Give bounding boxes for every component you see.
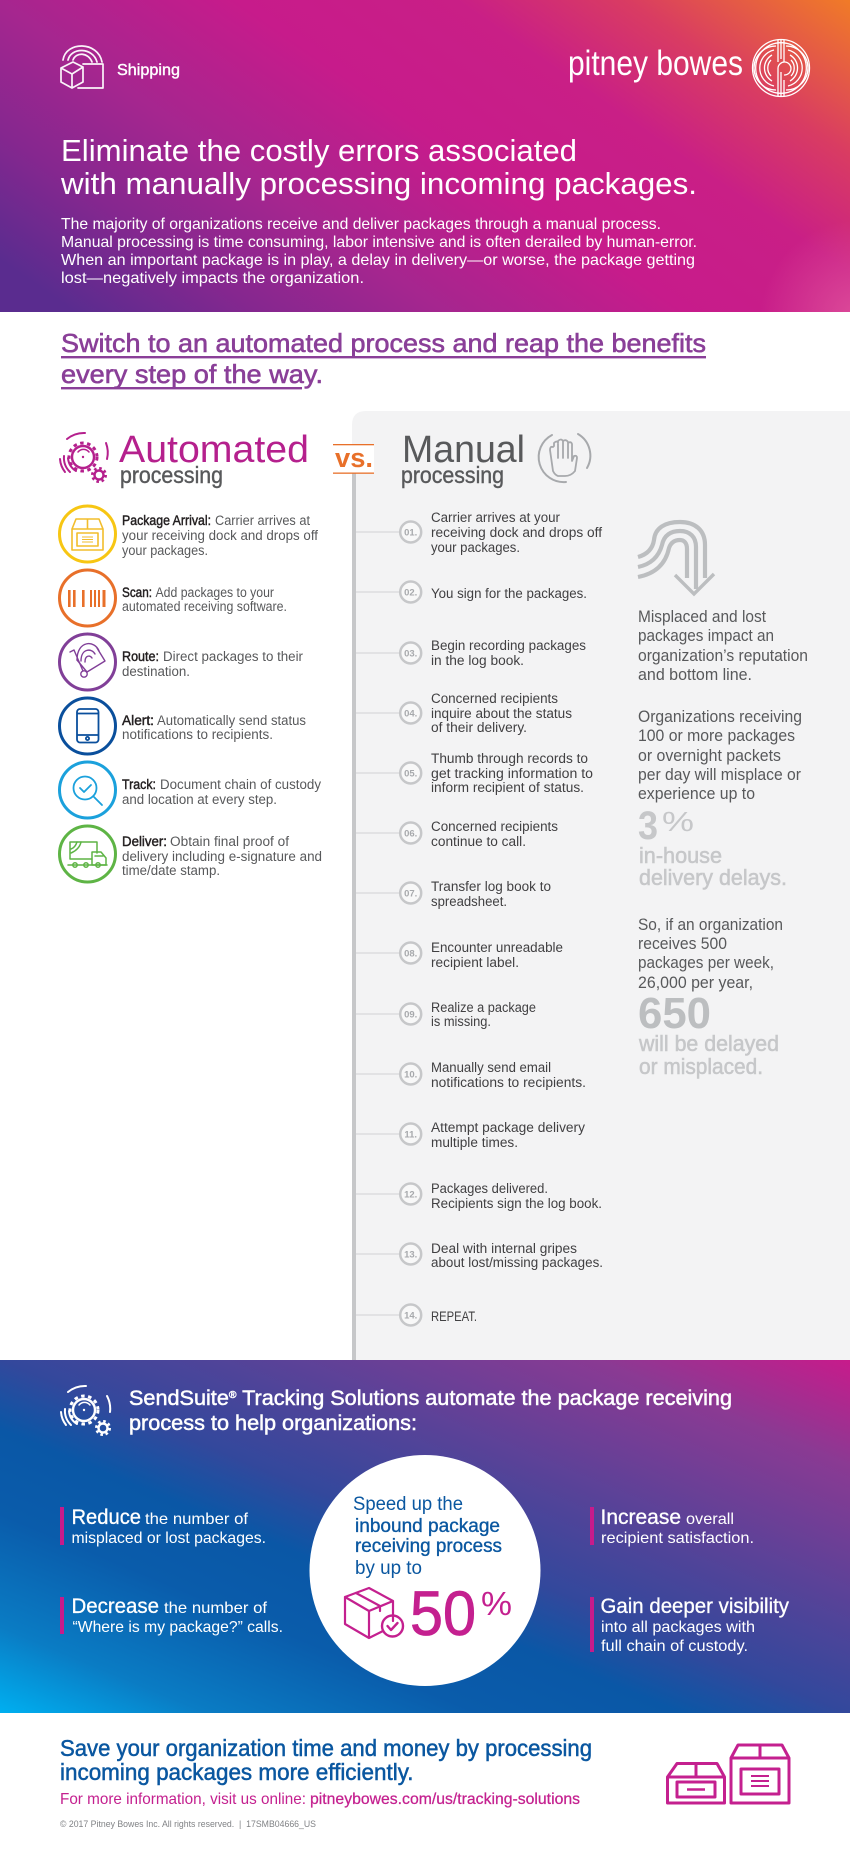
step 08: recipient label. (431, 955, 519, 970)
logo: pitney bowes: pitney bowes (568, 44, 743, 83)
stat: 3%: 3 (638, 804, 658, 848)
stat: 3% (638, 804, 787, 890)
step 05 (356, 751, 593, 795)
heading: SendSuite Tracking Solutions: SendSuite (129, 1387, 226, 1410)
step 06 (356, 819, 558, 849)
logo: pitney bowes (568, 39, 810, 97)
text: organizations receiving: experience up to (638, 784, 755, 803)
benefit: increase: recipient satisfaction. (601, 1530, 754, 1547)
intro paragraph: lost—negatively impacts the organization. (61, 270, 364, 287)
step: alert (60, 698, 306, 754)
step 02: 02. (404, 588, 417, 598)
heading: Automated processing: processing (120, 462, 223, 488)
footer headline: Save your organization time and money by processing (60, 1735, 592, 1761)
benefit: increase (590, 1506, 754, 1547)
step: track: Document chain of custody (160, 777, 321, 792)
stat: 3%: delivery delays. (639, 865, 787, 890)
benefit: reduce: misplaced or lost packages. (72, 1530, 266, 1547)
text: so, if an organization: packages per week, (638, 953, 774, 972)
step 06: Concerned recipients (431, 819, 558, 834)
step 11: multiple times. (431, 1135, 518, 1150)
step 09 (356, 1000, 536, 1029)
stat: 650: 650 (638, 989, 711, 1038)
step: track (60, 762, 321, 818)
text: misplaced and lost: and bottom line. (638, 665, 752, 684)
text: so, if an organization: 26,000 per year, (638, 973, 753, 992)
step 06: continue to call. (431, 834, 526, 849)
intro paragraph: When an important package is in play, a delay in delivery—or worse, the package getting (61, 252, 695, 269)
step: route: Route: (122, 649, 159, 664)
callout: 50 percent circle: 50 (410, 1579, 476, 1649)
callout: 50 percent circle: Speed up the (353, 1494, 463, 1515)
icon: checked box (345, 1588, 403, 1638)
step 11: 11. (404, 1130, 417, 1140)
title (60, 133, 697, 201)
step 11 (356, 1120, 585, 1150)
step: package arrival: Carrier arrives at (215, 513, 310, 528)
step: deliver (60, 826, 322, 882)
benefit: gain deeper visibility: into all packages with (601, 1619, 755, 1636)
step: route: Direct packages to their (163, 649, 303, 664)
footer link: pitneybowes.com/us/tracking-solutions (310, 1791, 580, 1808)
step 02: You sign for the packages. (431, 586, 587, 601)
benefit: reduce: Reduce (72, 1506, 141, 1529)
panel: SendSuite benefits (0, 1360, 850, 1713)
step 01: Carrier arrives at your (431, 510, 560, 525)
panel: manual grey background (352, 411, 850, 1360)
label: Shipping: Shipping (117, 62, 180, 79)
icon: automated gear (60, 433, 108, 482)
step 01 (356, 510, 602, 555)
stat: 650: will be delayed (638, 1031, 779, 1056)
benefit: reduce: the number of (145, 1511, 249, 1528)
step 07: 07. (404, 888, 417, 900)
callout: 50 percent circle (310, 1455, 540, 1686)
icon: down arrow (638, 522, 714, 594)
step: track: and location at every step. (122, 792, 277, 807)
step 14: 14. (404, 1310, 417, 1322)
step: package arrival (60, 506, 318, 562)
heading: Manual processing (401, 429, 525, 488)
step 05: inform recipient of status. (431, 780, 584, 795)
step 01: your packages. (431, 540, 520, 555)
step 10: Manually send email (431, 1060, 551, 1075)
panel: header banner (0, 0, 850, 312)
step: scan: automated receiving software. (122, 599, 287, 614)
step 14: REPEAT. (431, 1309, 477, 1324)
text: misplaced and lost (638, 607, 808, 684)
footer headline: incoming packages more efficiently. (60, 1759, 414, 1785)
text: organizations receiving: per day will misplace or (638, 765, 801, 784)
step 12 (356, 1181, 602, 1211)
step: scan: Add packages to your (156, 585, 274, 600)
intro paragraph: Manual processing is time consuming, labor intensive and is often derailed by human-error. (61, 234, 697, 251)
footer headline (60, 1735, 592, 1785)
benefit: decrease: the number of (164, 1600, 268, 1617)
benefit: decrease: Decrease (72, 1595, 159, 1618)
heading: switch to an automated process: every step of the way. (61, 359, 323, 389)
heading: SendSuite Tracking Solutions: ® (229, 1390, 237, 1401)
step: alert: Alert: (122, 713, 154, 728)
benefit: increase: overall (686, 1511, 734, 1528)
text: organizations receiving: or overnight packets (638, 746, 781, 765)
step 03: Begin recording packages (431, 638, 586, 653)
footer link: For more information, visit us online: (60, 1791, 306, 1808)
step: package arrival: your packages. (122, 543, 208, 558)
step: scan (60, 570, 287, 626)
step 07 (356, 879, 551, 909)
step: route (60, 634, 303, 690)
icon: two boxes (668, 1745, 789, 1803)
step: package arrival: your receiving dock and drops off (122, 528, 318, 543)
step 05: Thumb through records to (431, 751, 588, 766)
step 07: spreadsheet. (431, 894, 507, 909)
step: deliver: Obtain final proof of (170, 834, 289, 849)
step 10: 10. (404, 1070, 417, 1080)
callout: 50 percent circle: receiving process (355, 1536, 502, 1557)
footer link (60, 1791, 580, 1808)
step 13 (356, 1241, 603, 1270)
callout: 50 percent circle: % (481, 1585, 512, 1622)
heading: SendSuite Tracking Solutions: Tracking Solutions automate the package receiving (236, 1387, 732, 1410)
title: Eliminate the costly errors associated (61, 133, 577, 168)
step 09: is missing. (431, 1014, 491, 1029)
text: organizations receiving: Organizations receiving (638, 707, 802, 726)
step 13: Deal with internal gripes (431, 1241, 577, 1256)
step: deliver: delivery including e-signature and (122, 849, 322, 864)
icon: shipping box (61, 46, 103, 88)
benefit: gain deeper visibility: Gain deeper visibility (600, 1595, 789, 1618)
step: deliver: Deliver: (122, 834, 167, 849)
intro paragraph: The majority of organizations receive and deliver packages through a manual process. (61, 216, 661, 233)
step 03: in the log book. (431, 653, 524, 668)
step: scan: Scan: (122, 585, 152, 600)
step 10 (356, 1060, 586, 1090)
list: manual steps (356, 510, 603, 1326)
step 08: Encounter unreadable (431, 940, 563, 955)
stat: 650: or misplaced. (639, 1054, 763, 1079)
stat: 3%: % (662, 806, 694, 837)
callout: 50 percent circle: by up to (355, 1558, 422, 1579)
badge: vs.: vs. (335, 443, 373, 473)
text: organizations receiving: 100 or more packages (638, 726, 795, 745)
step 04: 04. (404, 708, 417, 720)
icon: hand (539, 434, 590, 482)
step 12: Packages delivered. (431, 1181, 548, 1196)
step 04: inquire about the status (431, 706, 572, 721)
step 04: Concerned recipients (431, 691, 558, 706)
benefit: gain deeper visibility: full chain of custody. (601, 1638, 748, 1655)
heading: Manual processing: Manual (402, 429, 525, 471)
step 01: receiving dock and drops off (431, 525, 602, 540)
heading: Automated processing (119, 429, 309, 488)
step 02 (356, 582, 587, 602)
heading: SendSuite Tracking Solutions (129, 1387, 732, 1435)
benefit: decrease (60, 1595, 283, 1636)
text: misplaced and lost: packages impact an (638, 626, 774, 645)
step 12: 12. (404, 1190, 417, 1200)
text: misplaced and lost: organization’s reputation (638, 646, 808, 665)
intro paragraph (61, 216, 697, 287)
text: misplaced and lost: Misplaced and lost (638, 607, 766, 626)
step 01: 01. (404, 528, 417, 538)
text: so, if an organization: So, if an organization (638, 915, 783, 934)
step: package arrival: Package Arrival: (122, 513, 211, 528)
step 08 (356, 940, 563, 970)
callout: 50 percent circle: inbound package (355, 1516, 500, 1537)
step 04 (356, 691, 572, 735)
step: deliver: time/date stamp. (122, 863, 220, 878)
step 09: Realize a package (431, 1000, 536, 1015)
heading: Manual processing: processing (401, 462, 504, 488)
step: route: destination. (122, 664, 190, 679)
stat: 3%: in-house (639, 843, 722, 868)
step 03 (356, 638, 586, 668)
benefit: reduce (60, 1506, 266, 1547)
heading: switch to an automated process (61, 328, 706, 389)
copyright: © 2017 Pitney Bowes Inc. All rights reserved. | 17SMB04666_US (60, 1819, 316, 1830)
step 14 (356, 1304, 477, 1326)
text: so, if an organization: receives 500 (638, 934, 727, 953)
step 05: 05. (404, 768, 417, 780)
text: organizations receiving (638, 707, 802, 803)
step 07: Transfer log book to (431, 879, 551, 894)
text: so, if an organization (638, 915, 783, 992)
benefit: decrease: “Where is my package?” calls. (72, 1619, 283, 1636)
heading: switch to an automated process: Switch to an automated process and reap the benefits (61, 328, 706, 358)
divider bar (352, 470, 356, 1360)
heading: SendSuite Tracking Solutions: process to help organizations: (129, 1412, 417, 1435)
stat: 650 (638, 989, 779, 1079)
step: alert: Automatically send status (157, 713, 306, 728)
benefit: increase: Increase (600, 1506, 681, 1529)
step 04: of their delivery. (431, 720, 527, 735)
step: alert: notifications to recipients. (122, 727, 273, 742)
step 08: 08. (404, 948, 417, 960)
step 11: Attempt package delivery (431, 1120, 585, 1135)
icon: white gear (61, 1386, 110, 1434)
step 12: Recipients sign the log book. (431, 1196, 602, 1211)
step: track: Track: (122, 777, 156, 792)
step 10: notifications to recipients. (431, 1075, 586, 1090)
step 03: 03. (404, 648, 417, 660)
step 13: about lost/missing packages. (431, 1255, 603, 1270)
step 05: get tracking information to (431, 766, 593, 781)
heading: Automated processing: Automated (119, 429, 309, 471)
step 13: 13. (404, 1250, 417, 1260)
step 06: 06. (404, 828, 417, 840)
step 09: 09. (404, 1010, 417, 1020)
title: with manually processing incoming packages. (60, 166, 697, 201)
benefit: gain deeper visibility (590, 1595, 789, 1655)
